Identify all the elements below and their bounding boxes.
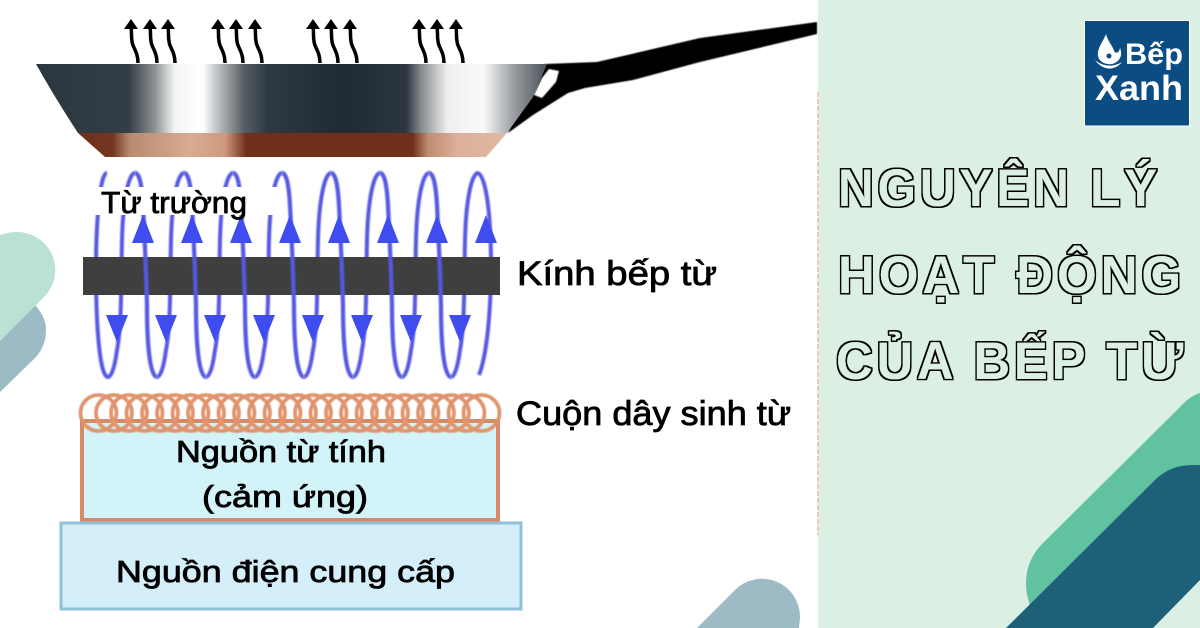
chart: magnetic field loops behind the glass — [96, 173, 491, 377]
label: Cuộn dây sinh từ: Cuộn dây sinh từ — [516, 395, 791, 433]
copper base — [78, 133, 507, 157]
label: Từ trường: Từ trường — [101, 185, 247, 220]
pan body — [36, 64, 547, 133]
box: power supply — [61, 523, 521, 609]
icon: heat arrows rising from pan — [124, 19, 463, 63]
label: Nguồn điện cung cấp: Nguồn điện cung cấp — [116, 554, 455, 589]
glass cooktop bar — [83, 257, 500, 295]
chart: magnetic field loops in front of the glass with arrows — [106, 173, 497, 377]
decorative shape: right bottom green and teal bars — [1006, 393, 1200, 628]
icon: induction coil — [80, 395, 500, 431]
label: Nguồn từ tính: Nguồn từ tính — [176, 434, 386, 469]
title: Nguyên lý hoạt động của bếp từ: NGUYÊN LÝ — [838, 157, 1161, 218]
logo text: Xanh: Xanh — [1095, 69, 1183, 108]
title: Nguyên lý hoạt động của bếp từ: HOẠT ĐỘNG — [838, 244, 1185, 305]
title: Nguyên lý hoạt động của bếp từ — [836, 157, 1187, 391]
icon: frying pan — [36, 22, 817, 157]
label: (cảm ứng): (cảm ứng) — [202, 479, 368, 514]
title: Nguyên lý hoạt động của bếp từ: CỦA BẾP TỪ — [836, 331, 1187, 391]
decorative shape: bottom blue bar — [697, 579, 800, 628]
pan handle — [508, 22, 817, 133]
label: Kính bếp từ: Kính bếp từ — [517, 255, 717, 293]
logo text: Bếp: Bếp — [1125, 38, 1183, 71]
logo: Bếp Xanh — [1084, 20, 1190, 126]
box: magnetic source — [82, 421, 498, 520]
icon: flame — [1095, 34, 1122, 69]
decorative shape: left mint and blue bars — [0, 232, 55, 392]
handle hole — [534, 69, 559, 98]
right title panel background — [818, 0, 1200, 628]
dashed panel edge — [817, 92, 819, 535]
